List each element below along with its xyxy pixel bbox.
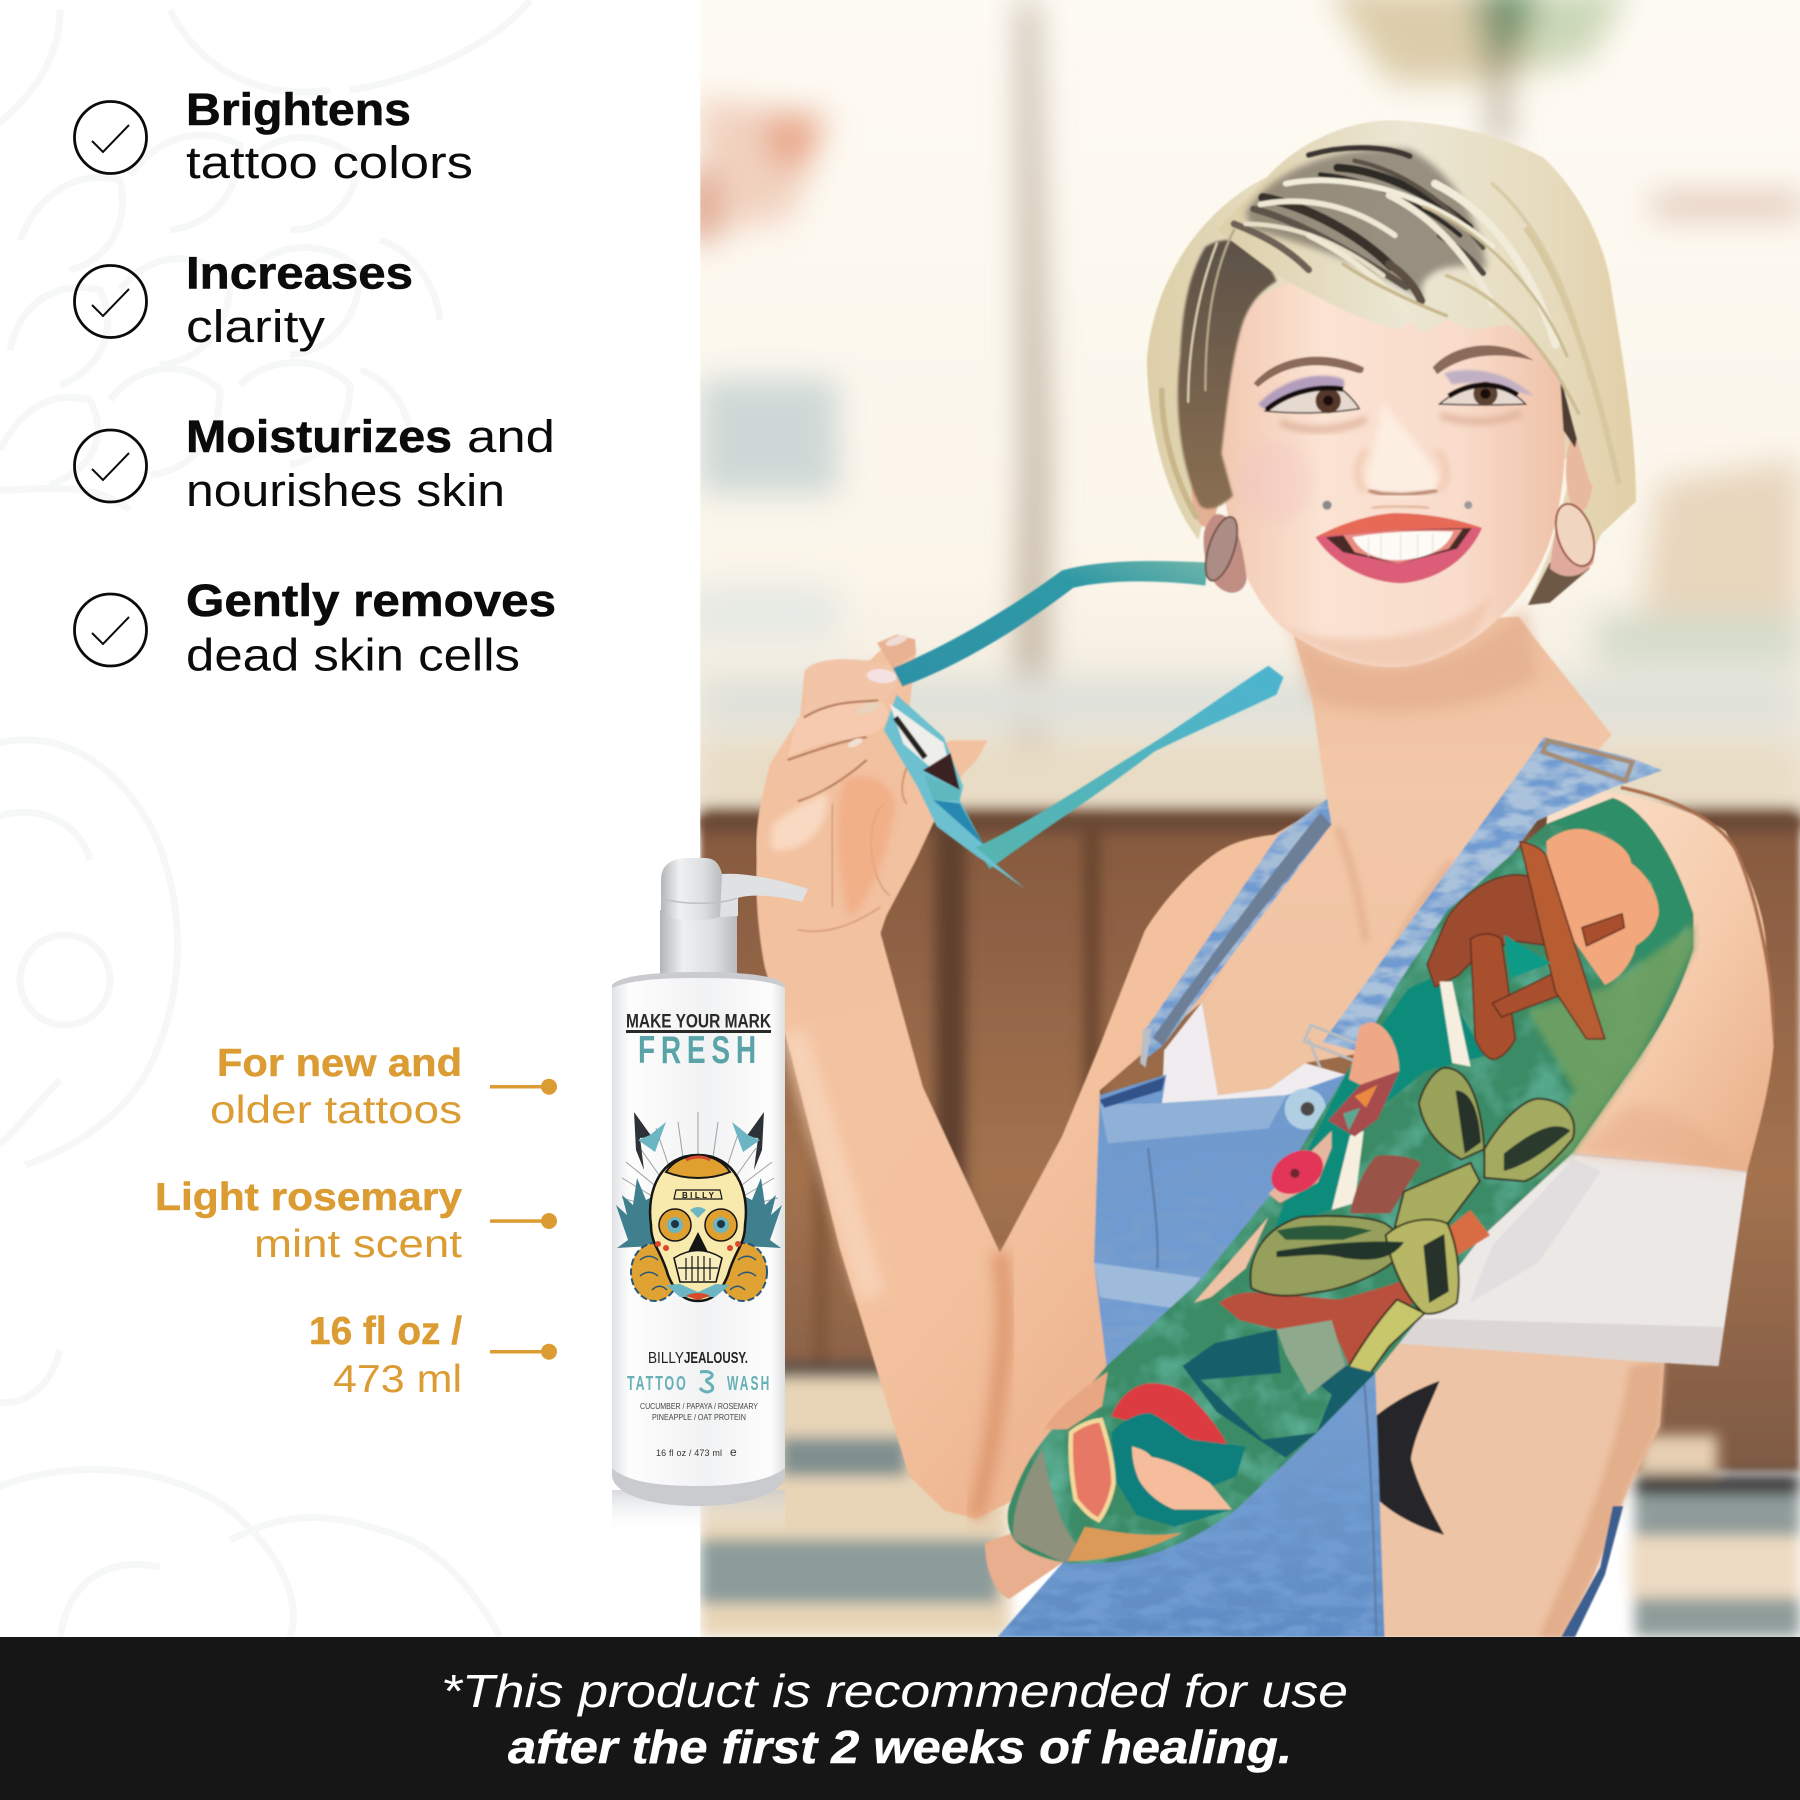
fringe hair with dark roots xyxy=(1162,120,1636,517)
hair back xyxy=(1147,120,1636,605)
callout: rosemary mint scent: mint scent xyxy=(254,1223,462,1266)
bottle brand text: WASH xyxy=(727,1373,771,1395)
benefit: gently removes: Gently removes xyxy=(186,575,556,626)
pump xyxy=(660,858,808,985)
benefit: moisturizes xyxy=(74,411,555,516)
callout: size: 16 fl oz / xyxy=(309,1310,462,1353)
benefit: gently removes xyxy=(74,575,556,680)
panel: white left background xyxy=(0,0,700,1637)
mouth and teeth xyxy=(1326,528,1472,564)
bottle brand text: PINEAPPLE / OAT PROTEIN xyxy=(652,1412,746,1422)
under eye shadow xyxy=(1280,413,1521,430)
product bottle xyxy=(612,858,808,1535)
peach cloud xyxy=(1546,829,1659,985)
hand under tattooed arm xyxy=(985,1533,1063,1599)
tan shoulder xyxy=(1546,788,1775,1171)
watermark: pale floral pattern xyxy=(0,0,530,1637)
benefit: brightens: Brightens xyxy=(186,84,411,135)
bottle heading xyxy=(626,1012,771,1072)
left overall strap xyxy=(1140,799,1332,1068)
bottle heading: FRESH xyxy=(638,1029,762,1072)
callout: size: 473 ml xyxy=(333,1358,462,1401)
callout: size xyxy=(309,1310,557,1401)
bottle body xyxy=(612,972,785,1506)
bottle brand text: JEALOUSY. xyxy=(684,1350,748,1367)
sunglasses xyxy=(884,561,1283,890)
bottom note text xyxy=(441,1665,1348,1773)
bottle reflection xyxy=(612,1490,785,1535)
bottle brand text: 16 fl oz / 473 ml xyxy=(656,1448,722,1458)
left eye xyxy=(1265,389,1359,413)
bottle brand text: BILLY xyxy=(648,1350,684,1367)
bottle brand text: TATTOO xyxy=(627,1372,688,1395)
bottom bar xyxy=(0,1637,1800,1800)
bottle heading: MAKE YOUR MARK xyxy=(626,1012,771,1032)
white crop top xyxy=(1395,1153,1747,1366)
bottom note text: after the first 2 weeks of healing. xyxy=(508,1721,1292,1773)
benefit: increases xyxy=(74,248,413,352)
benefit: increases: clarity xyxy=(186,301,326,352)
hair tuft behind right ear xyxy=(1528,563,1590,605)
benefit: moisturizes: Moisturizes xyxy=(186,411,452,462)
bottle brand text xyxy=(627,1350,771,1459)
teal swirl xyxy=(1111,1413,1246,1527)
sugar skull: BILLY xyxy=(682,1191,715,1200)
grapefruit xyxy=(1071,1420,1114,1520)
swallows xyxy=(634,1112,764,1170)
right eye xyxy=(1440,384,1526,405)
neck and chest xyxy=(1202,608,1612,1095)
benefit: gently removes: dead skin cells xyxy=(186,630,520,680)
sunburst rays xyxy=(622,1112,778,1206)
right overall strap xyxy=(1304,737,1662,1068)
lower teal leaves xyxy=(1182,1329,1375,1458)
lips xyxy=(1316,513,1482,583)
callout: new and older tattoos: older tattoos xyxy=(210,1089,462,1132)
photo: woman with tattooed arm holding sunglasses xyxy=(689,0,1800,1637)
callout: new and older tattoos: For new and xyxy=(217,1042,462,1085)
left dark side hair xyxy=(1178,240,1277,509)
balloon dog xyxy=(1251,1068,1574,1386)
blurred background xyxy=(689,0,1800,1637)
callout: rosemary mint scent: Light rosemary xyxy=(155,1176,462,1219)
brown flower xyxy=(1350,1155,1421,1213)
pineapples xyxy=(616,1178,782,1301)
nose xyxy=(1366,402,1440,496)
overalls button xyxy=(1285,1088,1326,1130)
benefit: brightens xyxy=(74,84,473,188)
eyebrows xyxy=(1254,357,1364,387)
fingers xyxy=(877,635,916,669)
raised hand xyxy=(756,634,988,968)
white undershirt at chest xyxy=(1162,1002,1345,1104)
skin strip by arm xyxy=(1194,1217,1268,1303)
peach cloud lower xyxy=(1132,1446,1232,1510)
benefit: brightens: tattoo colors xyxy=(186,137,473,188)
peach and bird blossom xyxy=(1349,1022,1399,1091)
bottle brand text: e xyxy=(730,1445,737,1459)
biplane xyxy=(1427,841,1624,1060)
bottom note text: *This product is recommended for use xyxy=(441,1665,1348,1717)
benefit: moisturizes: nourishes skin xyxy=(186,465,505,516)
right dark hair behind fringe xyxy=(1560,379,1582,448)
callout: new and older tattoos xyxy=(210,1042,557,1132)
tattooed arm sleeve xyxy=(1008,798,1693,1563)
abdomen with bird tattoo xyxy=(1372,1337,1665,1637)
face xyxy=(1192,278,1593,667)
woman figure xyxy=(756,120,1775,1637)
nails xyxy=(866,668,897,684)
eyeshadow xyxy=(1258,376,1344,409)
overalls denim bib xyxy=(998,1074,1384,1637)
red blossom xyxy=(1270,1149,1324,1195)
raised arm and shoulder xyxy=(765,804,1327,1519)
bottle brand text: CUCUMBER / PAPAYA / ROSEMARY xyxy=(640,1401,758,1411)
white stripes xyxy=(1440,982,1471,1066)
sugar skull xyxy=(650,1155,746,1301)
benefit: increases: Increases xyxy=(186,248,413,298)
ear plugs xyxy=(1199,499,1601,593)
benefit: moisturizes: and xyxy=(467,411,555,462)
callout: rosemary mint scent xyxy=(155,1176,557,1266)
piercings xyxy=(1322,501,1332,510)
red stripe xyxy=(1111,1383,1228,1446)
